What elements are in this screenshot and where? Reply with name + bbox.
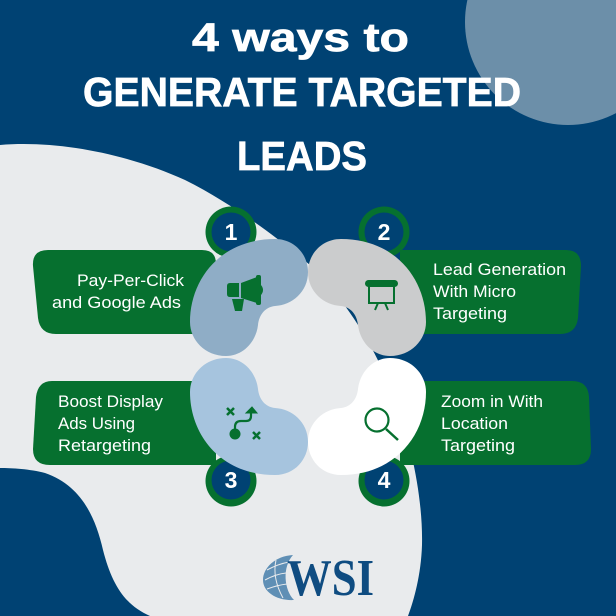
icon: magnifier — [366, 408, 398, 440]
title: GENERATE TARGETED — [83, 69, 521, 115]
decorative corner circle — [465, 0, 616, 125]
panel 2: micro targeting: Targeting — [433, 304, 507, 323]
panel 1: pay-per-click: Pay-Per-Click — [77, 271, 185, 290]
number badge 3: 3 — [225, 467, 237, 493]
WSI logo: WSI — [287, 550, 374, 607]
panel 4: location targeting — [400, 381, 591, 465]
panel 1: pay-per-click: and Google Ads — [52, 293, 181, 312]
blob 4 with magnifier — [308, 358, 426, 475]
panel 3: display retargeting — [33, 381, 216, 465]
title: 4 ways to — [192, 16, 409, 60]
icon: strategy path — [227, 407, 260, 440]
panel 3: display retargeting: Retargeting — [58, 436, 151, 455]
panel 2: micro targeting: Lead Generation — [433, 260, 566, 279]
title — [83, 16, 521, 179]
panel 4: location targeting: Targeting — [441, 436, 515, 455]
blob 1 with megaphone — [190, 239, 308, 356]
WSI logo — [263, 550, 374, 607]
number badge 4: 4 — [378, 467, 391, 493]
panel 2: micro targeting: With Micro — [433, 282, 516, 301]
number badge 2: 2 — [378, 219, 390, 245]
number badge 1 — [206, 206, 256, 258]
panel 1: pay-per-click — [33, 250, 216, 334]
icon: globe — [263, 555, 294, 600]
title: LEADS — [237, 133, 367, 179]
icon: megaphone — [227, 275, 263, 311]
panel 3: display retargeting: Ads Using — [58, 414, 135, 433]
icon: presentation board — [366, 281, 397, 310]
number badge 4 — [358, 456, 410, 506]
number badge 1: 1 — [225, 219, 238, 245]
panel 3: display retargeting: Boost Display — [58, 392, 164, 411]
number badge 2 — [358, 206, 410, 258]
panel 4: location targeting: Location — [441, 414, 508, 433]
blob 3 with strategy icon — [190, 358, 308, 475]
panel 2: micro targeting — [400, 250, 581, 334]
light background shape — [0, 144, 422, 616]
blob 2 with presentation board — [308, 239, 426, 356]
number badge 3 — [206, 456, 256, 506]
panel 4: location targeting: Zoom in With — [441, 392, 543, 411]
